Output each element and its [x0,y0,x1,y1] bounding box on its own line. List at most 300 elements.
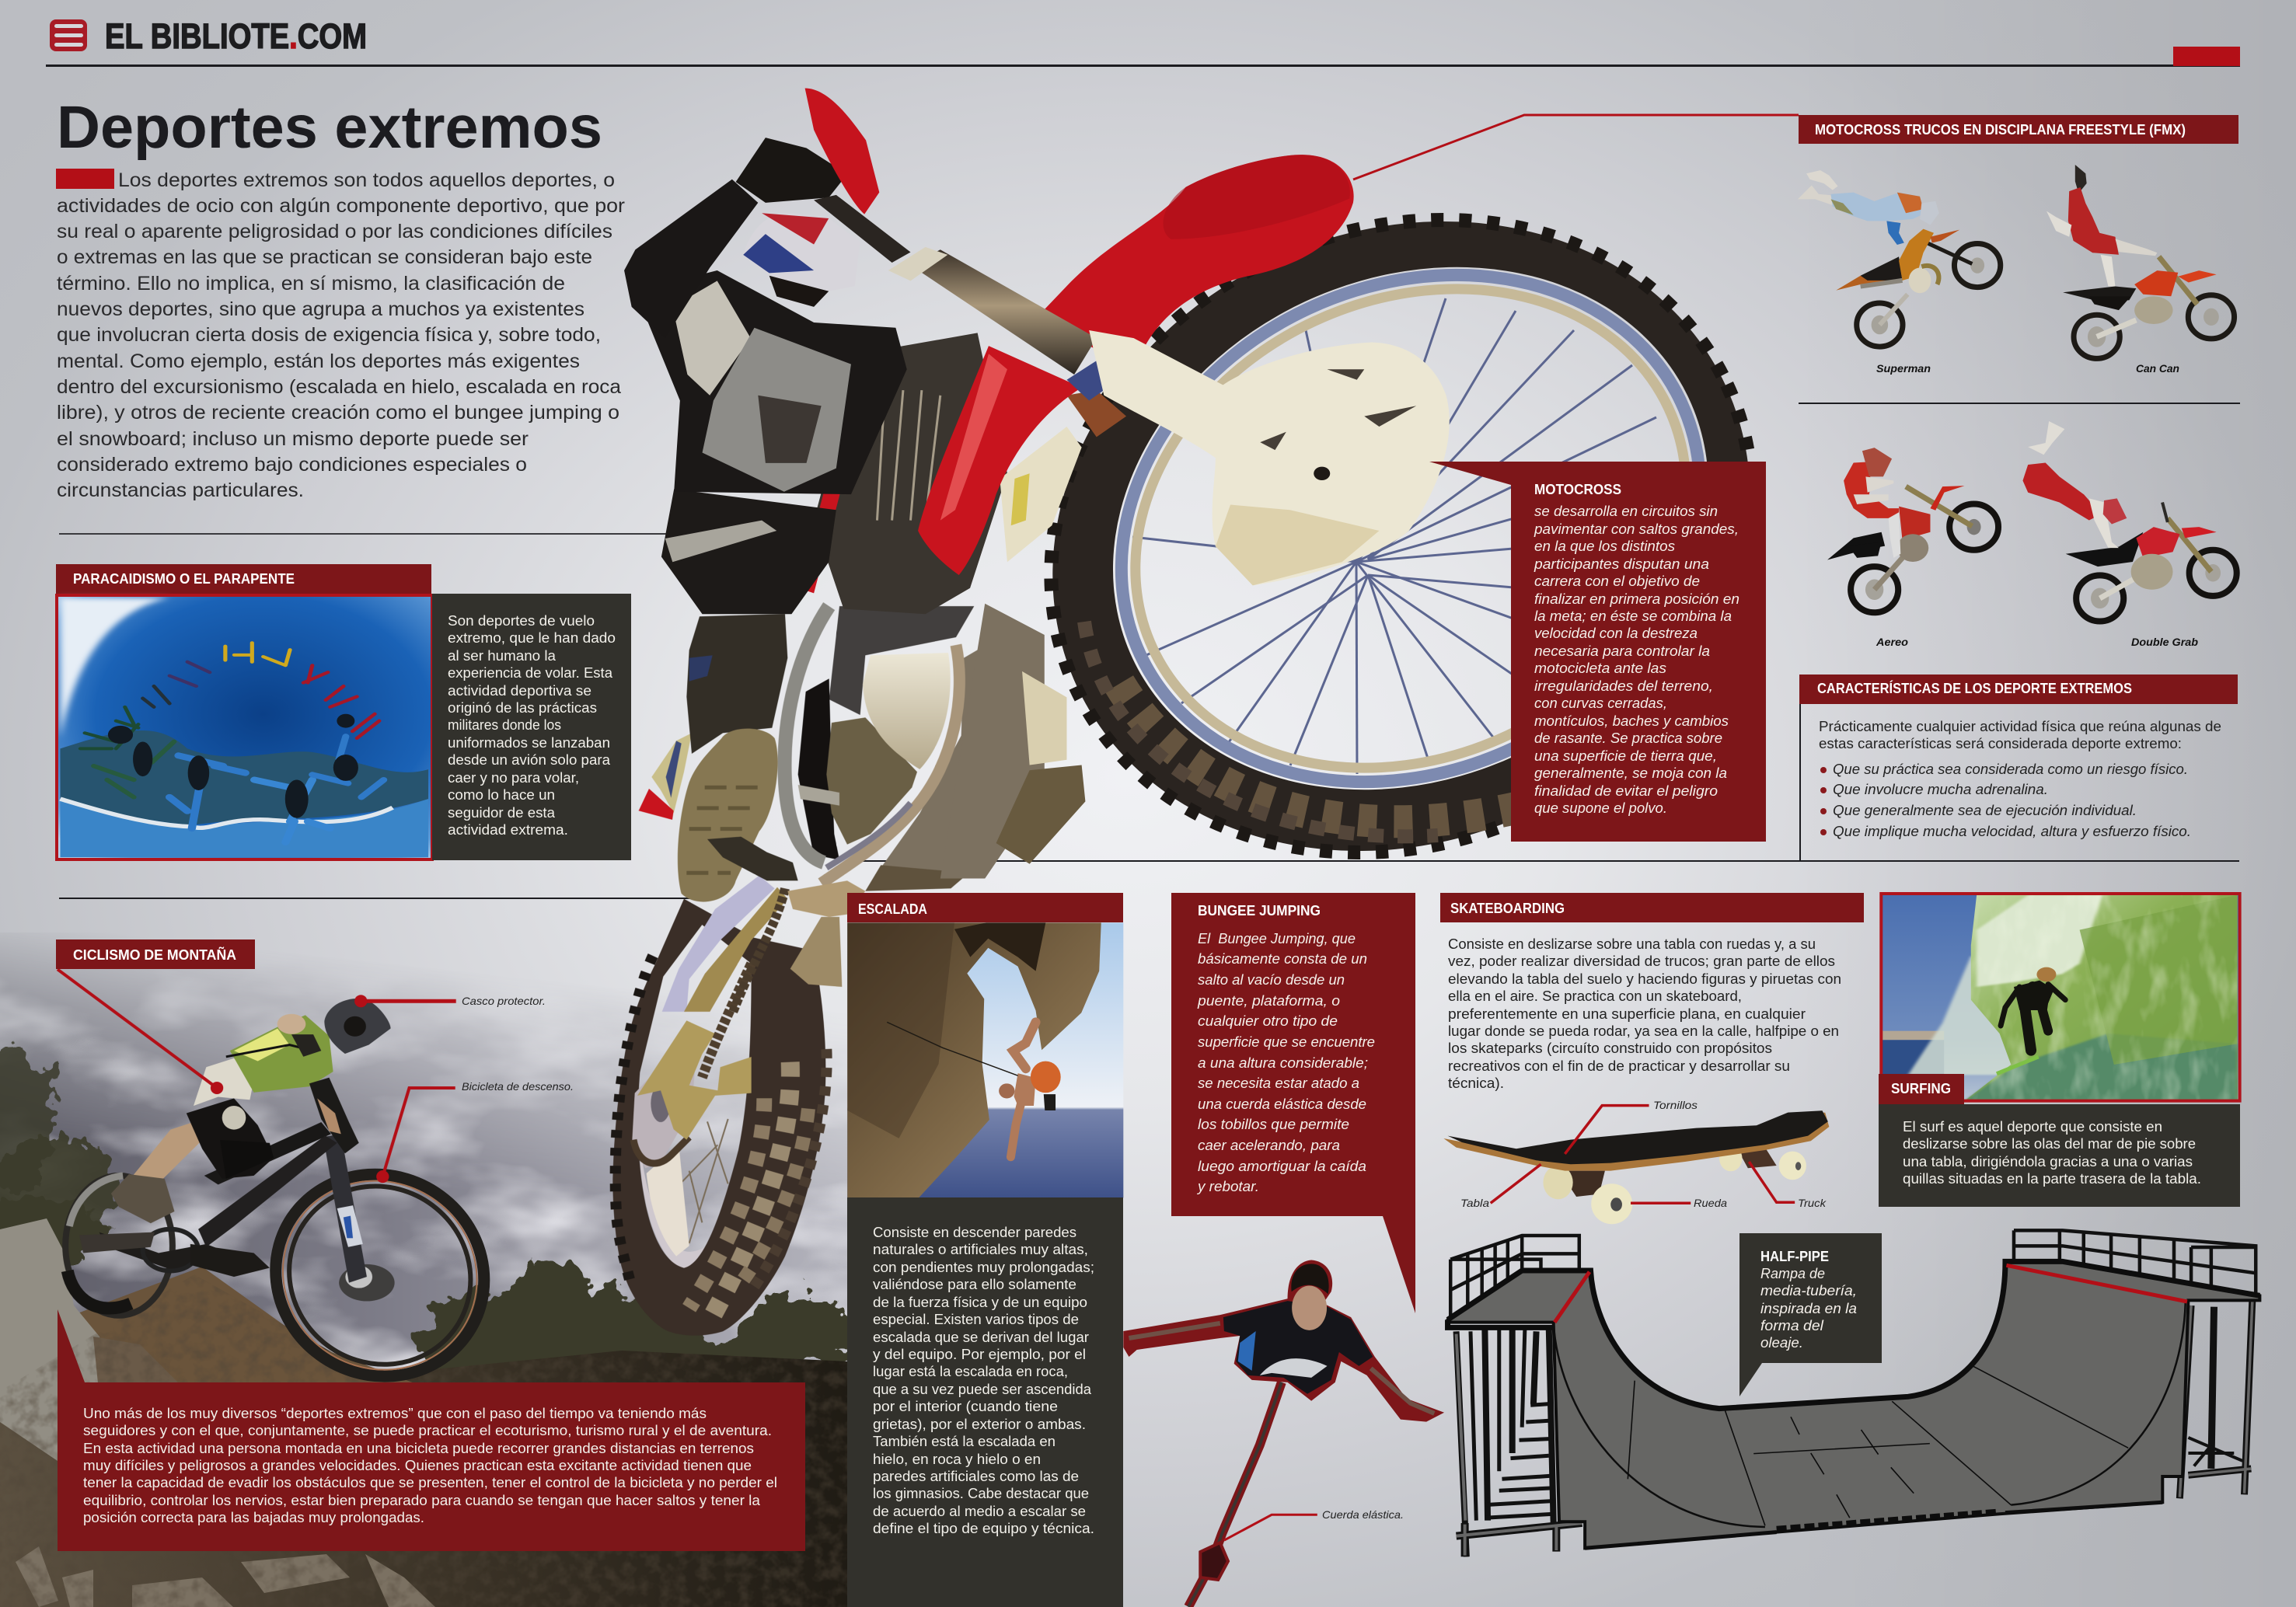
motocross text: que supone el polvo. [1534,800,1667,816]
panel: motocross trucos freestyle [1798,115,2238,648]
paracaidismo text: extremo, que le han dado [448,630,616,646]
logo wordmark: EL BIBLIOTE.COM [105,16,367,56]
panel: escalada [847,893,1123,1607]
front wheel [947,107,1856,965]
photo: skydivers over the earth [57,595,432,859]
tire [1052,221,1750,851]
motocross text: montículos, baches y cambios [1534,713,1729,729]
top header rule [46,64,2240,67]
escalada text: especial. Existen varios tipos de [873,1312,1079,1327]
half-pipe text: inspirada en la [1760,1301,1857,1316]
surfing text: una tabla, dirigiéndola gracias a una o varias [1903,1154,2193,1170]
right engine cases [881,640,995,876]
ciclismo text: posición correcta para las bajadas muy prolongadas. [83,1510,424,1525]
jumper arms [1129,1323,1434,1414]
helmet [324,999,391,1054]
glove [736,138,847,203]
fork tube [911,249,1097,375]
engine casing [826,717,917,845]
intro text block: Los deportes extremos son todos aquellos deportes, o [118,169,615,191]
escalada text [873,1225,1094,1536]
ciclismo text: seguidores y con el que, conjuntamente, se puede practicar el ecoturismo, turismo rural y el de aventura. [83,1423,772,1438]
illustration: half-pipe ramp [1448,1230,2259,1556]
rear spokes [651,1119,728,1243]
rear tire [612,899,825,1336]
white engine guard [863,653,951,769]
panel: bungee jumping [1123,893,1444,1607]
fork [323,1134,367,1283]
rope knot [1200,1543,1228,1580]
paracaidismo text: actividad deportiva se [448,683,591,699]
leader line [1224,1515,1317,1540]
dark text box [432,594,631,860]
photo: stormy sky [0,936,847,1368]
escalada text: valiéndose para ello solamente [873,1277,1076,1292]
upper engine [829,606,974,715]
ciclismo text: tener la capacidad de evadir los obstáculos que se presenten, tener el control de la bicicleta y no perder el [83,1475,777,1490]
escalada text: con pendientes muy prolongadas; [873,1260,1094,1275]
label: truck: Truck [1798,1197,1827,1209]
logo [50,16,367,56]
bike and rider body [624,89,1450,879]
chain upper [702,964,752,1078]
motocross text: finalizar en primera posición en [1534,591,1739,607]
header bar [1799,115,2238,144]
intro text block: que involucran cierta dosis de exigencia física y, sobre todo, [57,324,601,346]
photo: rope [887,1022,1018,1075]
red leader line to FMX header [1353,115,1799,180]
bungee text: caer acelerando, para [1198,1138,1340,1153]
photo: surfboard [1997,1057,2039,1074]
motocross text: la meta; en éste se combina la [1534,608,1732,624]
photo: chalk bag [1044,1094,1056,1110]
intro text block [56,169,625,501]
bungee text: luego amortiguar la caída [1198,1159,1366,1174]
panel: half-pipe [1448,1230,2259,1556]
motocross text: carrera con el objetivo de [1534,573,1700,589]
grip tape [1448,1110,1828,1164]
motocross text: finalidad de evitar el peligro [1534,783,1718,799]
bungee text [1196,931,1375,1194]
bungee text: se necesita estar atado a [1198,1075,1359,1091]
photo: dirt slope [78,1267,497,1407]
photo: spray [1908,956,2028,1075]
motocross text: en la que los distintos [1534,539,1675,554]
skateboarding text: los skateparks (circuíto construido con propósitos [1448,1041,1772,1056]
panel: surfing [1879,894,2240,1207]
label: casco protector: Casco protector. [462,995,546,1007]
skateboarding text: lugar donde se pueda rodar, ya sea en la calle, halfpipe o en [1448,1023,1839,1039]
escalada text: y del equipo. Por ejemplo, por el [873,1347,1086,1362]
bungee text: El Bungee Jumping, que [1198,931,1356,946]
paracaidismo text: caer y no para volar, [448,770,579,786]
surfing text: quillas situadas en la parte trasera de la tabla. [1903,1171,2201,1187]
rear fender red tip [639,789,674,820]
rust pipe [1066,390,1126,437]
skateboarding text: recreativos con el fin de de practicar y desarrollar su [1448,1058,1790,1074]
half-pipe text: media-tubería, [1760,1283,1857,1298]
caption: double grab: Double Grab [2131,636,2198,648]
photo: surfer body [2001,985,2065,1051]
disc brake and hub [339,1264,395,1301]
motocross text: de rasante. Se practica sobre [1534,730,1722,746]
header bar [1799,675,2238,704]
chest protector [703,328,851,492]
motocross text: velocidad con la destreza [1534,626,1698,641]
paracaidismo text: desde un avión solo para [448,752,611,768]
skateboarding text: preferentemente en una superficie plana, en cualquier [1448,1006,1806,1022]
jersey [230,1015,333,1093]
icon: logo stack [50,19,87,51]
paracaidismo text [448,613,616,838]
illustration: bungee jumper [1123,1260,1444,1607]
front wheel [264,1168,495,1383]
leader: rueda [1631,1202,1691,1204]
motocross text [1534,504,1739,816]
rear wheels [1719,1145,1742,1171]
bungee text: una cuerda elástica desde [1198,1096,1366,1112]
elastic rope [1188,1382,1282,1607]
bungee text: los tobillos que permite [1198,1117,1349,1132]
header bar: PARACAIDISMO O EL PARAPENTE [73,571,295,587]
rear tire tread [713,1062,790,1316]
panel: motocross callout [1429,462,1766,842]
rear rim [640,1160,707,1269]
header bar: CARACTERÍSTICAS DE LOS DEPORTE EXTREMOS [1817,680,2132,696]
rear tire side knobs [616,956,653,1280]
panel: paracaidismo [56,564,631,860]
spokes [1132,298,1671,774]
red coping right [2006,1265,2187,1302]
photo: surfer in a green wave [1881,894,2240,1101]
photo: sea at bottom [60,799,428,857]
escalada text: define el tipo de equipo y técnica. [873,1521,1094,1536]
surfing label [1879,1074,1964,1104]
photo: bushes on the horizon [0,1049,855,1383]
ramp surface [1448,1261,2259,1548]
photo: skydiver ring [80,643,384,842]
half-pipe text [1760,1266,1857,1351]
lower red fender [918,346,1082,575]
boot shaft [686,614,787,754]
dark text box [1879,1104,2240,1207]
ciclismo text: equilibrio, controlar los nervios, estar bien preparado para cuando se tengan que hacer saltos y tener la [83,1493,761,1508]
ciclismo text: muy difíciles y peligrosos a grandes velocidades. Quienes practican esta excitante actividad tienen que [83,1458,752,1473]
photo: surfer head [2036,967,2056,981]
caption: superman: Superman [1876,362,1931,375]
escalada text: También está la escalada en [873,1434,1056,1449]
forearm [309,1078,359,1153]
chain [733,888,785,1012]
dark engine gap [798,678,839,860]
escalada text: grietas), por el exterior o ambas. [873,1417,1086,1432]
escalada text: de acuerdo al medio a escalar se [873,1504,1086,1519]
jumper hair [1291,1264,1329,1294]
radiator and frame [814,333,1007,614]
trick: can can [2047,165,2235,358]
motocross text: generalmente, se moja con la [1534,765,1727,781]
photo: coast and sea [1881,1031,1944,1040]
intro text block: nuevos deportes, sino que agrupa a muchos ya existentes [57,298,584,320]
bike underside and rider boot [639,606,995,1012]
escalada text: los gimnasios. Cabe destacar que [873,1486,1089,1501]
bullet list: Que involucre mucha adrenalina. [1833,782,2048,797]
ramp deck edge [1448,1261,2259,1409]
intro text [1819,719,2221,751]
panel: ciclismo labels and text [56,939,805,1551]
header bar: SKATEBOARDING [1450,901,1565,916]
front wheels [1779,1152,1806,1180]
jumper clothes highlights [1238,1331,1256,1371]
bungee heading: BUNGEE JUMPING [1198,903,1321,919]
swingarm [637,1020,752,1140]
white fork guard and hub cover [1089,330,1450,585]
intro text block: mental. Como ejemplo, están los deportes más exigentes [57,350,580,372]
ramp inner curves [1554,1303,2186,1527]
label: tornillos: Tornillos [1653,1099,1698,1111]
right boot [996,765,1085,864]
intro text: Prácticamente cualquier actividad física que reúna algunas de [1819,719,2221,734]
label: cuerda elástica: Cuerda elástica. [1322,1508,1404,1521]
rear wheel [65,1176,173,1316]
caption: can can: Can Can [2136,362,2179,375]
label: tabla: Tabla [1460,1197,1489,1209]
half-pipe callout [1739,1233,1882,1396]
pant tip [651,733,692,814]
bullet list: Que generalmente sea de ejecución individual. [1833,803,2137,818]
callout box [1171,893,1415,1313]
handlebar [814,195,911,263]
trick: double grab [2022,421,2237,622]
chain lower [633,1137,689,1163]
intro text block: su real o aparente peligrosidad o por las condiciones difíciles [57,221,612,242]
intro text block: término. Ello no implica, en sí mismo, la clasificación de [57,273,565,295]
backpack strap [226,1045,302,1057]
rim [1056,201,1765,856]
caption: aereo: Aereo [1876,636,1908,648]
ciclismo text: Uno más de los muy diversos “deportes extremos” que con el paso del tiempo va teniendo más [83,1406,707,1421]
illustration: mountain bike and rider [58,969,495,1383]
panel: skateboarding [1440,893,1864,1224]
tan swingarm [684,887,787,1012]
photo: wave streaks [1965,895,2238,1100]
white shorts [194,1058,254,1106]
panel: ciclismo de montaña photo [0,932,855,1607]
half-pipe heading: HALF-PIPE [1760,1249,1829,1264]
escalada text: naturales o artificiales muy altas, [873,1242,1088,1257]
rear frame struts [790,917,842,987]
frame [204,1122,331,1184]
leader: tornillos [1565,1106,1649,1154]
leader line: casco [361,999,456,1003]
skateboarding text: Consiste en deslizarse sobre una tabla con ruedas y, a su [1448,936,1816,952]
skateboarding text: elevando la tabla del suelo y haciendo figuras y piruetas con [1448,971,1841,987]
motocross text: participantes disputan una [1534,556,1709,572]
escalada text: por el interior (cuando tiene [873,1399,1058,1414]
paracaidismo text: militares donde los [448,717,561,733]
escalada text: de la fuerza física y de un equipo [873,1295,1087,1310]
intro text block: el snowboard; incluso un mismo deporte puede ser [57,428,529,450]
bungee text: superficie que se encuentre [1198,1034,1375,1050]
photo: ground [0,1274,848,1607]
bungee text: básicamente consta de un [1198,951,1367,967]
escalada text: escalada que se derivan del lugar [873,1330,1089,1345]
right legs [2179,1300,2252,1498]
footpeg bracket [798,785,839,806]
footpeg [707,837,798,880]
left railing [1450,1236,1579,1316]
raised arm [624,180,758,338]
paracaidismo text: seguidor de esta [448,805,556,821]
half-pipe text: forma del [1760,1318,1824,1333]
header bar: MOTOCROSS TRUCOS EN DISCIPLANA FREESTYLE (FMX) [1815,122,2186,138]
bungee text: puente, plataforma, o [1197,993,1340,1009]
photo: surfer torso [2014,981,2053,1010]
motocross text: pavimentar con saltos grandes, [1534,521,1739,537]
photo: climber arms and legs [1010,1022,1036,1157]
bullet list: Que su práctica sea considerada como un riesgo físico. [1833,762,2188,777]
motocross text: irregularidades del terreno, [1534,678,1713,694]
motocross text: una superficie de tierra que, [1534,748,1717,764]
photo: wave [1965,895,2238,1100]
intro text block: o extremas en las que se practican se consideran bajo este [57,246,592,268]
ramp seams [1628,1365,2128,1525]
dark text box [847,1197,1123,1607]
jumper face [1292,1285,1327,1330]
leader: truck [1749,1162,1795,1202]
skateboarding text: ella en el aire. Se practica con un skateboard, [1448,988,1742,1004]
photo: climber shorts [1031,1061,1061,1093]
paracaidismo text: como lo hace un [448,787,555,803]
paracaidismo text: al ser humano la [448,648,557,664]
header bar [56,564,431,594]
bungee text: salto al vacío desde un [1198,972,1345,988]
red coping left [1555,1272,1589,1323]
bullet list: Que implique mucha velocidad, altura y esfuerzo físico. [1833,824,2191,839]
header bar [1440,893,1864,922]
motocross heading: MOTOCROSS [1534,482,1621,497]
header bar [56,939,255,969]
escalada text: Consiste en descender paredes [873,1225,1076,1240]
paracaidismo text: actividad extrema. [448,822,568,838]
deck edge [1443,1113,1829,1171]
surfing text [1903,1119,2201,1187]
rider leg [133,1119,202,1183]
photo: climber torso [1014,1073,1036,1106]
right railing [2014,1230,2256,1292]
escalada text: paredes artificiales como las de [873,1469,1079,1484]
illustration: skateboard [1443,1106,1829,1224]
photo: grain on rocks and ground [0,1274,848,1607]
callout box [1429,462,1766,842]
jumper outline [1123,1260,1444,1422]
surfing label: SURFING [1891,1081,1951,1096]
bullet list [1820,762,2191,839]
motocross text: se desarrolla en circuitos sin [1534,504,1718,519]
trick: aereo [1827,448,1998,612]
hand guard [805,89,879,214]
ramp bottom bumps [1777,1511,2000,1529]
ciclismo text: En esta actividad una persona montada en una bicicleta puede recorrer grandes distancias en terrenos [83,1441,754,1456]
ciclismo text [83,1406,777,1525]
helmet [743,213,860,291]
photo: boulder [0,1218,117,1461]
lavender swingarm panel [662,876,775,1012]
photo frame [1881,894,2240,1101]
leader line: ciclismo [58,969,217,1088]
leader: tabla [1491,1164,1541,1203]
trick: superman [1798,170,2001,347]
leader line: bicicleta [382,1088,455,1176]
rider pants [661,489,836,614]
photo: rock [847,922,1101,1197]
photo: coast land [60,730,428,825]
escalada text: hielo, en roca y hielo o en [873,1452,1041,1467]
side panel [1000,427,1082,562]
rider shoe [111,1174,174,1223]
surfing text: deslizarse sobre las olas del mar de pie sobre [1903,1136,2196,1152]
bungee text: y rebotar. [1196,1179,1259,1194]
main illustration: motocross rider on a wheelie [612,89,1856,1336]
label: rueda: Rueda [1694,1197,1727,1209]
hub centre [787,880,865,917]
intro text block: libre), y otros de reciente creación como el bungee jumping o [57,402,619,424]
left tower [1457,1329,1554,1556]
paracaidismo text: Son deportes de vuelo [448,613,595,629]
upper red fender [1037,155,1354,354]
paracaidismo text: uniformados se lanzaban [448,735,610,751]
header bar [847,893,1123,922]
jumper t-shirt [1223,1301,1373,1394]
header bar: CICLISMO DE MONTAÑA [73,946,236,963]
title: Deportes extremos [57,94,602,161]
photo: stones [16,1546,435,1607]
label: bicicleta de descenso: Bicicleta de descenso. [462,1080,574,1093]
motocross text: motocicleta ante las [1534,661,1666,676]
escalada text: lugar está la escalada en roca, [873,1364,1068,1379]
paracaidismo text: originó de las prácticas [448,700,597,716]
motocross text: necesaria para controlar la [1534,643,1710,659]
photo: skydiver bodies [108,714,358,818]
skateboarding text: vez, poder realizar diversidad de trucos; gran parte de ellos [1448,953,1835,969]
half-pipe text: Rampa de [1760,1266,1825,1281]
section tab [2173,47,2240,66]
sprocket [632,1044,697,1168]
intro text: estas características será considerada deporte extremo: [1819,736,2182,751]
plastic skid guard right [1022,671,1066,765]
intro text block: actividades de ocio con algún componente deportivo, que por [57,195,625,217]
skateboarding text: técnica). [1448,1075,1504,1091]
bungee text: a una altura considerable; [1198,1055,1368,1071]
red callout box [58,1309,805,1551]
header bar: ESCALADA [858,901,927,917]
escalada text: que a su vez puede ser ascendida [873,1382,1092,1397]
panel: características [1799,675,2238,839]
trucks [1736,1148,1777,1168]
rider torso [635,270,907,494]
half-pipe text: oleaje. [1760,1335,1803,1351]
section dividers [59,403,2240,899]
bungee text: cualquier otro tipo de [1198,1013,1338,1029]
photo: climber on rock over sea [847,922,1123,1197]
intro text block: dentro del excursionismo (escalada en hielo, escalada en roca [57,376,621,398]
rear wheel [612,899,827,1336]
engine side [940,604,1045,879]
intro text block: considerado extremo bajo condiciones especiales o [57,454,527,476]
intro text block: circunstancias particulares. [57,479,304,501]
boot sole [678,728,778,902]
photo: sky corners [60,598,169,738]
